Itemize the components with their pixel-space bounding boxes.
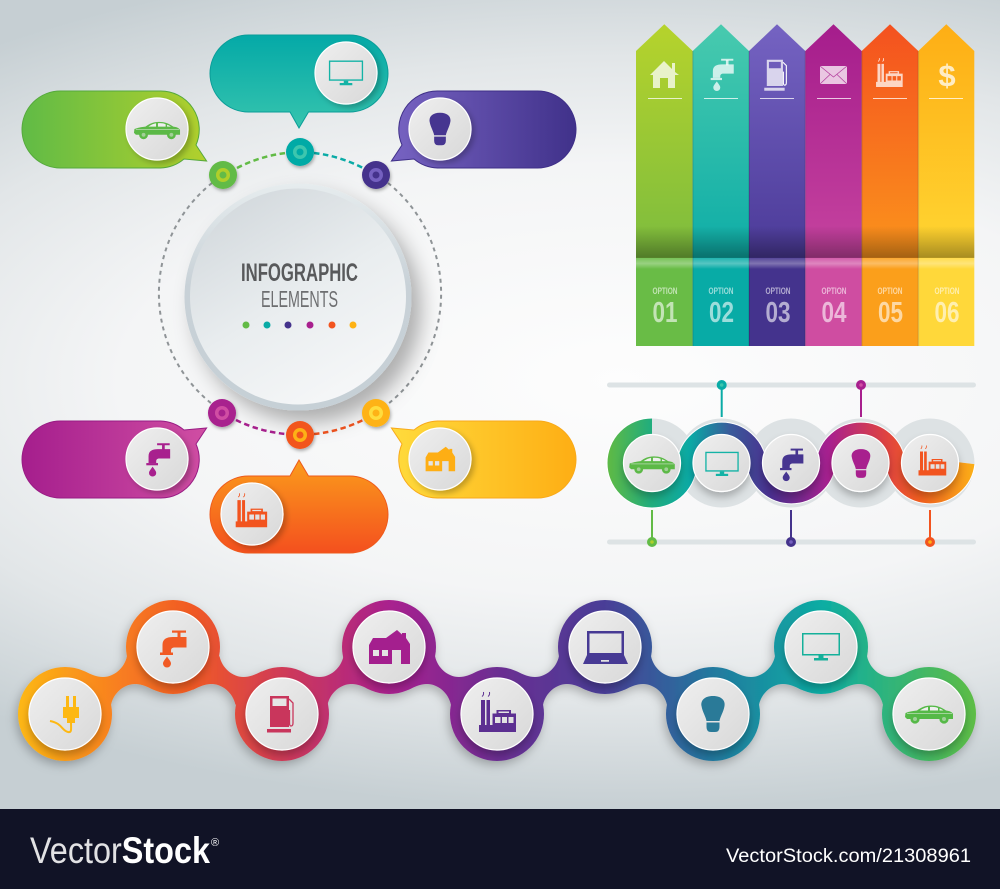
step: factory (902, 434, 958, 492)
column 5 orange (862, 24, 918, 346)
step: plug (29, 678, 101, 750)
image id: VectorStock.com/21308961 (726, 846, 971, 867)
timeline bars (607, 382, 976, 544)
icon: envelope (820, 66, 847, 84)
option labels: OPTION (878, 286, 903, 297)
callout: magenta tap (22, 421, 207, 498)
step: monitor (693, 434, 750, 492)
callout: orange factory (210, 460, 388, 553)
option labels: OPTION (708, 286, 734, 297)
callout: teal monitor (210, 35, 388, 128)
chain ribbon (12, 599, 979, 770)
step: fuel pump (246, 678, 318, 750)
option labels: OPTION (934, 286, 960, 297)
footer bar (0, 809, 1000, 889)
connector stems (652, 385, 930, 542)
grey discs (608, 418, 974, 508)
title: INFOGRAPHIC (241, 259, 358, 287)
icon row (650, 58, 956, 93)
panel: icon chain (12, 599, 979, 770)
step: bulb (832, 434, 889, 492)
node: magenta (208, 399, 236, 427)
option labels: 03 (766, 297, 790, 329)
step: house (353, 611, 425, 683)
panel: arrow columns (636, 24, 974, 346)
panel: radial diagram (22, 35, 576, 553)
step: factory (461, 678, 533, 750)
icon underlines (648, 98, 963, 99)
icon: tap (711, 59, 734, 91)
option labels: 02 (709, 297, 734, 329)
callout: yellow house (391, 421, 576, 498)
node: yellow (362, 399, 390, 427)
dashed ring (159, 153, 441, 434)
node: purple (362, 161, 390, 189)
option labels: 05 (878, 297, 903, 329)
step: tap (762, 434, 820, 492)
option labels: 01 (652, 297, 678, 329)
column 3 purple (749, 24, 805, 346)
step: laptop (569, 611, 641, 683)
option labels: 04 (822, 297, 846, 329)
icon: dollar: $ (938, 58, 956, 93)
callout: purple bulb (391, 91, 576, 168)
column 2 teal (693, 24, 749, 346)
logo: VectorStock (30, 830, 210, 871)
column 6 yellow (918, 24, 974, 346)
node: orange (286, 421, 314, 449)
step: car (624, 434, 680, 492)
step: monitor (785, 611, 857, 683)
option labels (652, 286, 960, 329)
icon: fuel pump (764, 60, 786, 91)
colour dots (242, 322, 356, 328)
option labels: OPTION (822, 286, 847, 297)
step: car (893, 678, 965, 750)
timeline markers (647, 380, 935, 547)
column 1 green (636, 24, 693, 346)
callout: green car (22, 91, 207, 168)
step: tap (137, 611, 209, 683)
registered mark: ® (211, 837, 219, 849)
node: teal (286, 138, 314, 166)
column 4 magenta (805, 24, 862, 346)
option labels: 06 (934, 297, 960, 329)
snake ribbon (617, 428, 965, 498)
option labels: OPTION (652, 286, 678, 297)
icon: factory (876, 58, 903, 87)
panel: snake timeline (607, 380, 976, 547)
subtitle: ELEMENTS (261, 286, 338, 312)
option labels: OPTION (766, 286, 791, 297)
node: green (209, 161, 237, 189)
central disc (184, 184, 412, 410)
icon: house (650, 61, 679, 88)
step: bulb (677, 678, 749, 750)
